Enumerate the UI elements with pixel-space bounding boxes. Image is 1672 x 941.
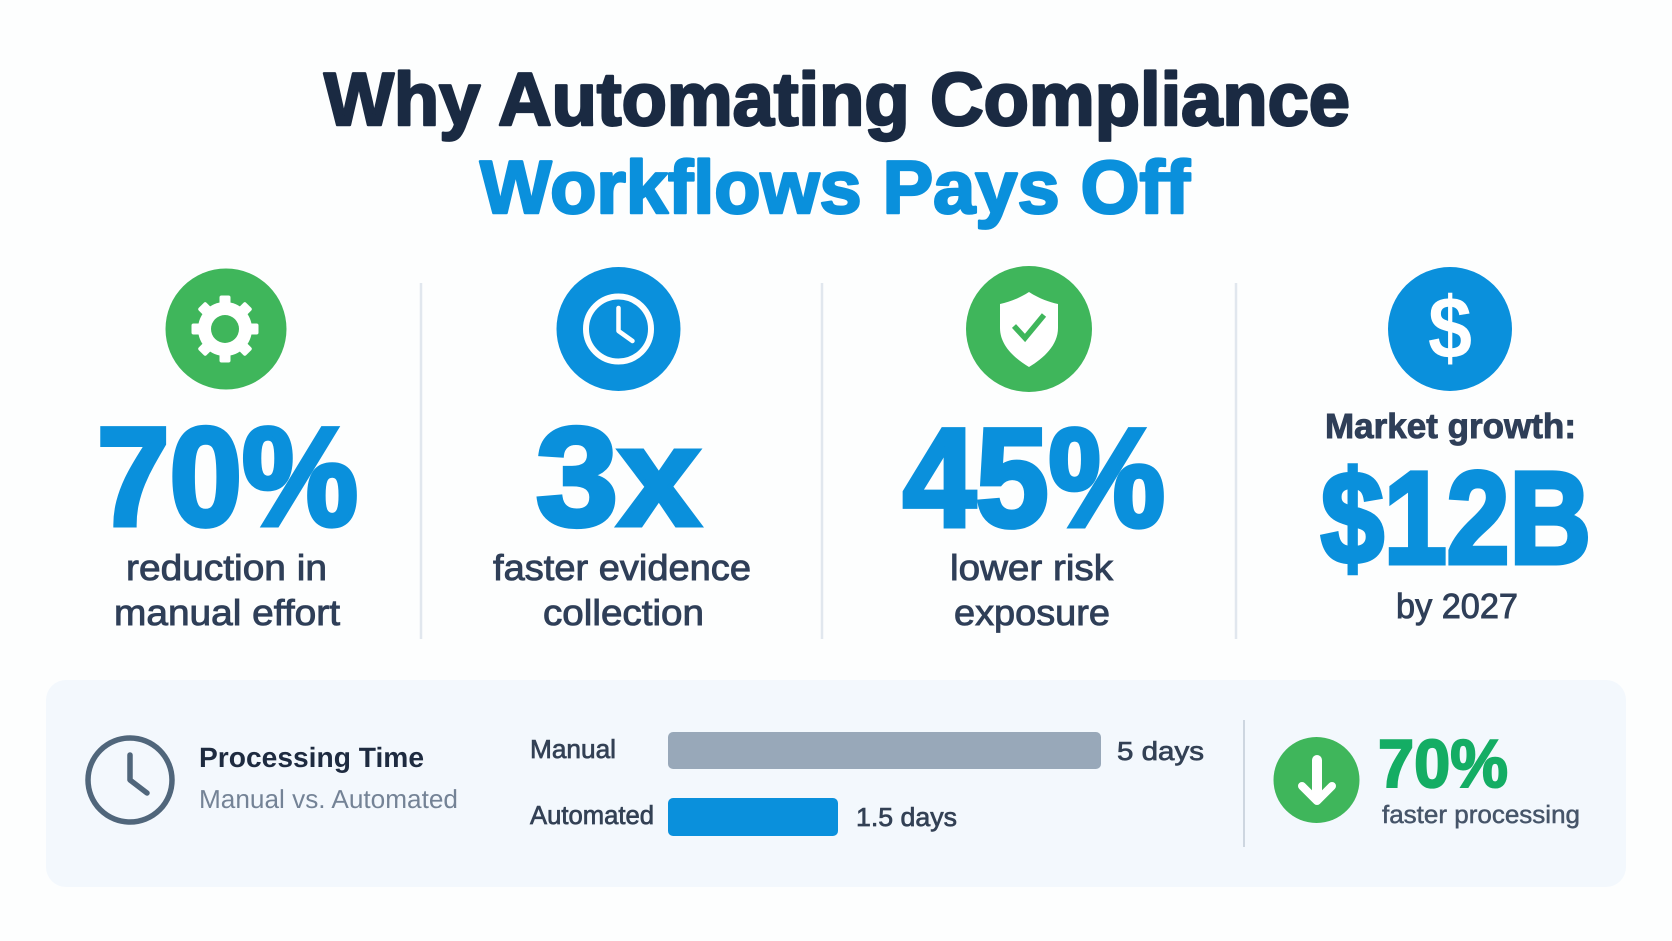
label: faster evidence collection — [493, 547, 751, 633]
icon: clock — [556, 267, 680, 391]
label: reduction in manual effort: reduction in — [126, 547, 327, 588]
stat: 3x: 3x — [536, 398, 700, 555]
stat: 45%: 45% — [903, 399, 1165, 556]
icon: shield with check — [966, 266, 1092, 392]
label: lower risk exposure — [950, 547, 1114, 633]
icon: down arrow — [1274, 737, 1360, 823]
bar chart: processing days — [530, 732, 1204, 836]
text: by 2027: by 2027 — [1396, 587, 1518, 626]
label: faster processing: faster processing — [1382, 801, 1580, 829]
label: manual: Manual — [530, 734, 616, 764]
panel: 70% reduction in manual effort — [97, 268, 358, 633]
label: lower risk exposure: lower risk — [950, 547, 1114, 588]
stat: 70% faster: 70% — [1378, 726, 1508, 802]
title: Workflows Pays Off — [480, 145, 1191, 229]
panel: market growth $12B by 2027 — [1321, 267, 1591, 626]
label: automated: Automated — [530, 800, 654, 830]
divider lines between stats — [421, 283, 1236, 639]
icon: dollar — [1388, 267, 1512, 391]
value: 1.5 days: 1.5 days — [856, 802, 957, 832]
icon: outline clock — [88, 738, 172, 822]
panel: processing time comparison — [46, 680, 1626, 887]
label: faster evidence collection: collection — [543, 592, 704, 633]
stat: 70%: 70% — [97, 398, 358, 555]
panel: 3x faster evidence collection — [493, 267, 751, 633]
label: lower risk exposure: exposure — [954, 592, 1110, 633]
title: Why Automating Compliance — [324, 57, 1350, 141]
label: reduction in manual effort: manual effort — [114, 592, 340, 633]
label: faster evidence collection: faster evidence — [493, 547, 751, 588]
heading: processing time: Processing Time — [199, 742, 424, 773]
stat: $12B: $12B — [1321, 444, 1591, 591]
icon: dollar: $ — [1428, 278, 1472, 377]
value: 5 days: 5 days — [1117, 736, 1204, 766]
subheading: manual vs automated: Manual vs. Automated — [199, 784, 458, 814]
text: market growth: Market growth: — [1325, 407, 1576, 446]
icon: gear — [166, 268, 286, 390]
label: reduction in manual effort — [114, 547, 340, 633]
title — [324, 57, 1350, 229]
bar: manual — [668, 732, 1101, 769]
panel: 45% lower risk exposure — [903, 266, 1165, 633]
bar: automated — [668, 798, 838, 836]
